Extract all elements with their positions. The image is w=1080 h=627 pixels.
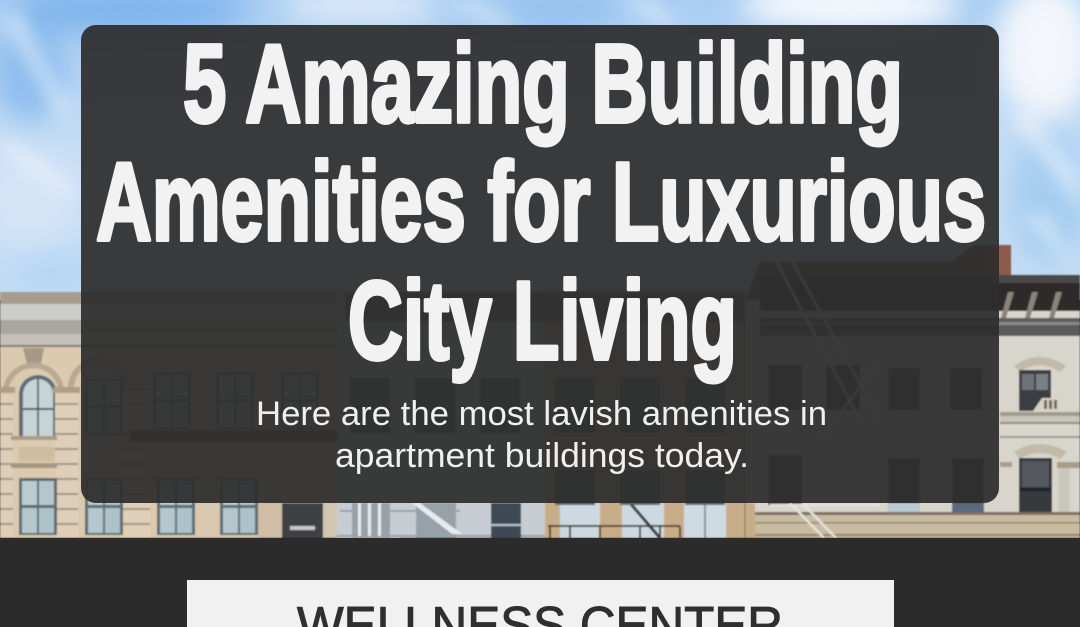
dark lower band — [0, 538, 1080, 627]
subtitle — [256, 395, 827, 475]
stone base — [745, 512, 1080, 538]
dim centre windows behind panel — [350, 378, 725, 505]
building facade right — [745, 245, 1080, 538]
right lower window — [1019, 458, 1052, 512]
arched window moldings — [3, 363, 64, 388]
keystone ornament — [23, 348, 44, 369]
arched upper window — [19, 375, 57, 436]
section heading card — [187, 580, 894, 627]
fire escape railing — [548, 526, 680, 538]
ground floor windows — [19, 478, 57, 535]
title: City Living — [348, 259, 737, 383]
right lower window molding — [1014, 444, 1067, 459]
ledge — [1000, 412, 1080, 416]
dim windows behind panel — [768, 365, 984, 510]
rusticated pillars — [0, 388, 13, 538]
title — [96, 22, 986, 383]
chimney — [990, 245, 1011, 277]
dim upper windows behind panel — [85, 378, 123, 435]
right upper window — [1019, 370, 1051, 411]
subtitle: apartment buildings today. — [335, 437, 749, 475]
title panel — [81, 22, 999, 503]
dark storefront sign — [282, 503, 323, 538]
sill and spandrel — [11, 436, 57, 440]
building facade left — [0, 292, 400, 538]
right upper window molding — [1014, 357, 1066, 372]
fire escape — [770, 250, 880, 538]
building facade centre — [337, 290, 745, 538]
sky background — [0, 0, 1080, 300]
cornice — [760, 275, 1080, 283]
air conditioner — [1033, 398, 1059, 411]
subtitle: Here are the most lavish amenities in — [256, 395, 827, 433]
